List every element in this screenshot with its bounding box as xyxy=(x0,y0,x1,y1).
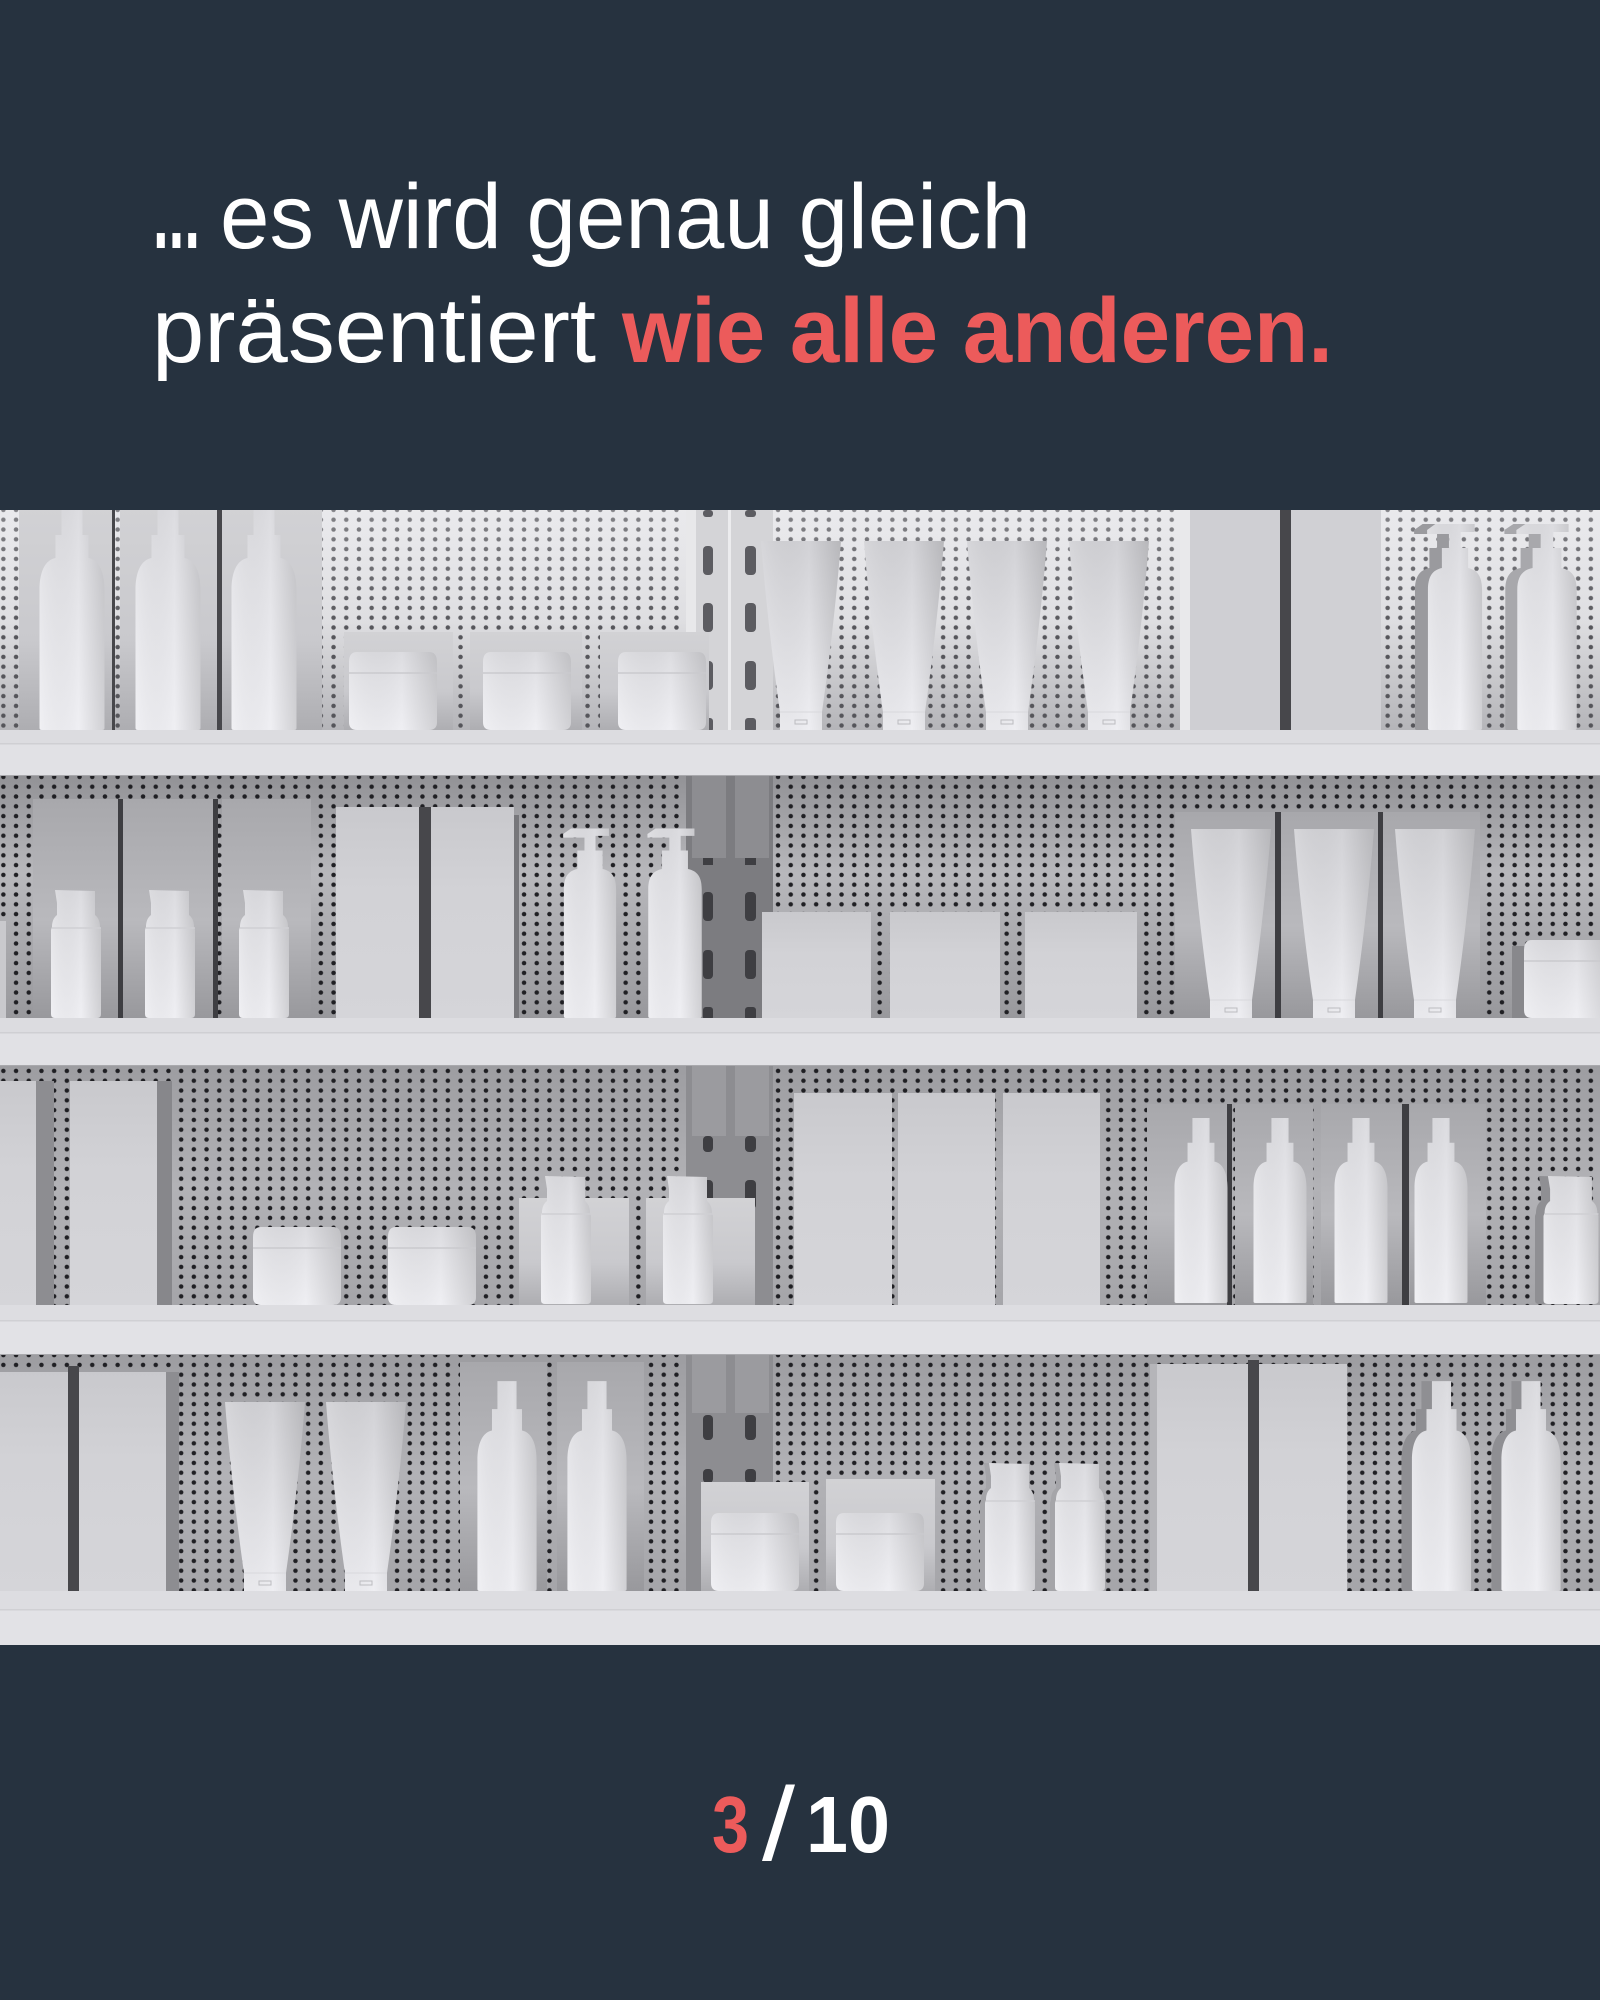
title line 1: es wird genau gleich xyxy=(220,166,1031,268)
display boxes behind bottles xyxy=(1147,1104,1486,1306)
shelf boards xyxy=(0,730,1600,1645)
low boxes xyxy=(701,1479,935,1592)
display boxes behind bottles xyxy=(19,505,322,731)
tubes xyxy=(761,541,1149,730)
shelf 1 products xyxy=(19,505,1577,731)
shelf 2 products xyxy=(0,799,1600,1019)
title line 2 xyxy=(152,280,1333,382)
tube display boxes xyxy=(1175,812,1480,1019)
pump bottles xyxy=(1414,524,1577,730)
tall boxes left xyxy=(0,1081,172,1306)
title line 1: ... xyxy=(153,158,200,270)
title line 2: präsentiert xyxy=(152,280,596,382)
tall boxes xyxy=(1180,510,1381,730)
tall boxes right xyxy=(1150,1360,1347,1592)
boxes behind jars xyxy=(344,632,709,731)
airless bottles xyxy=(980,1463,1105,1591)
airless bottle right xyxy=(1535,1176,1598,1304)
jars xyxy=(253,1227,476,1305)
pump bottles xyxy=(563,828,702,1018)
jar xyxy=(1512,940,1600,1019)
shelf 3 products xyxy=(0,1081,1598,1306)
bottles xyxy=(477,1381,627,1591)
jars xyxy=(349,652,706,730)
tall boxes left xyxy=(0,1366,179,1592)
shelf 4 products xyxy=(0,1360,1561,1592)
bottles right xyxy=(1401,1381,1561,1591)
display boxes behind bottles xyxy=(460,1362,644,1592)
bottles xyxy=(40,505,296,730)
tubes xyxy=(1191,829,1475,1018)
slash: / xyxy=(762,1767,795,1883)
page counter xyxy=(712,1767,890,1883)
tall boxes middle xyxy=(794,1093,1100,1306)
airless bottles xyxy=(51,890,289,1018)
tubes xyxy=(225,1402,406,1591)
pegboard back wall xyxy=(0,510,1600,1593)
bottles xyxy=(1175,1118,1467,1303)
jars xyxy=(711,1513,924,1591)
current page number: 3 xyxy=(712,1780,749,1869)
metal upright post xyxy=(686,510,773,1593)
dark gaps xyxy=(112,510,222,730)
low boxes xyxy=(762,912,1137,1019)
title line 2: wie alle anderen. xyxy=(621,280,1333,382)
display boxes behind airless bottles xyxy=(33,799,311,1019)
photo: store shelves with white cosmetic products xyxy=(0,505,1600,1645)
tall boxes xyxy=(336,807,519,1019)
total pages: 10 xyxy=(806,1780,890,1869)
airless bottles xyxy=(541,1176,713,1304)
boxes behind airless bottles xyxy=(519,1198,755,1306)
title xyxy=(152,158,1333,382)
